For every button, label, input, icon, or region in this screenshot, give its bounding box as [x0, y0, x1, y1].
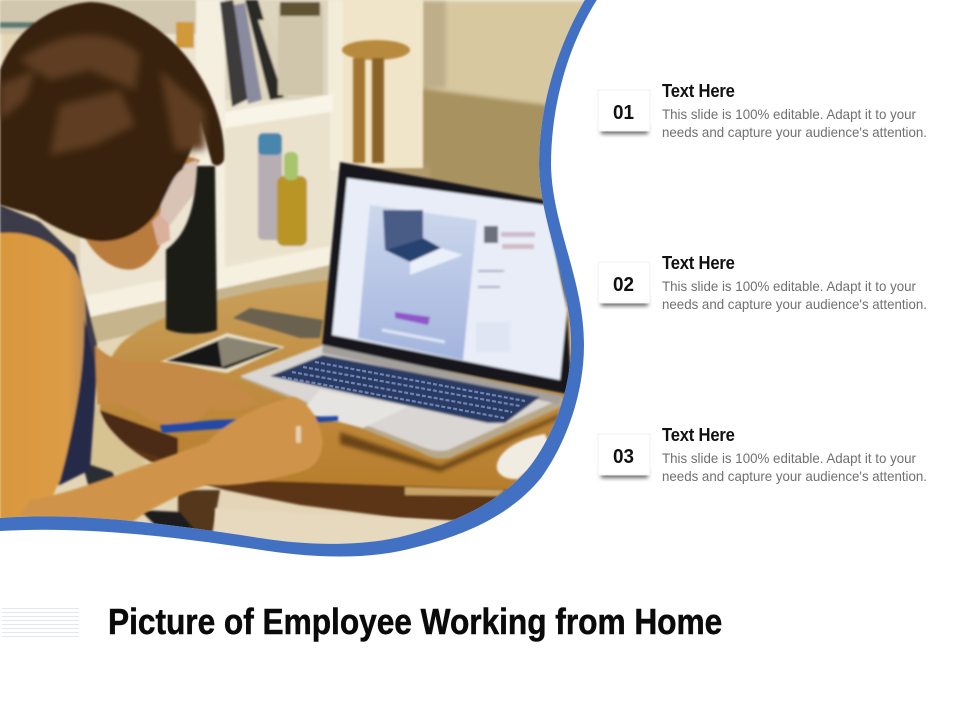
person: body and arms [0, 205, 338, 523]
blue wave border around photo [0, 0, 598, 557]
item 2 [598, 252, 927, 312]
photo background: wall and floor [0, 0, 600, 560]
photo: employee working on a laptop at home [0, 0, 600, 560]
item 3 description: This slide is 100% editable. Adapt it to your [662, 450, 916, 466]
item 1 description: needs and capture your audience's attention. [662, 124, 927, 140]
item 1 heading: Text Here [662, 80, 735, 101]
number badge 02 [598, 262, 650, 306]
number badge 03 [598, 434, 650, 478]
floor in the foreground [214, 506, 454, 529]
bookshelf [0, 0, 423, 345]
item 3 heading: Text Here [662, 424, 735, 445]
item 1 [598, 80, 927, 140]
item 1 description: This slide is 100% editable. Adapt it to your [662, 106, 916, 122]
item 3 [598, 424, 927, 484]
number badge 03: 03 [613, 446, 634, 468]
phones on table [160, 308, 323, 373]
number badge 01 [598, 90, 650, 134]
person: hair and face [0, 2, 224, 270]
item 3 description: needs and capture your audience's attention. [662, 468, 927, 484]
item 2 description: This slide is 100% editable. Adapt it to your [662, 278, 916, 294]
item 2 description: needs and capture your audience's attention. [662, 296, 927, 312]
item 2 heading: Text Here [662, 252, 735, 273]
round table [100, 280, 570, 535]
title: Picture of Employee Working from Home [108, 602, 722, 642]
number badge 02: 02 [613, 274, 634, 296]
laptop [240, 162, 572, 472]
decorative striped block beside title [2, 608, 79, 636]
number badge 01: 01 [613, 102, 634, 124]
computer mouse [497, 434, 552, 479]
black flask [166, 166, 217, 334]
stool [342, 40, 410, 163]
